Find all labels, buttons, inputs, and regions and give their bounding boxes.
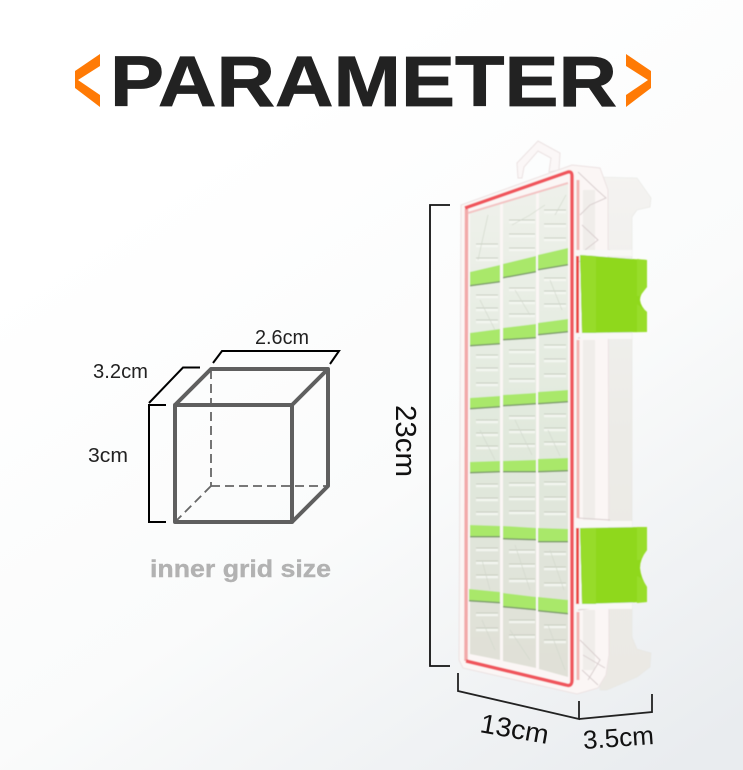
green divider bars xyxy=(469,248,568,613)
cube diagram: inner grid size xyxy=(88,327,339,583)
lid side panel shading xyxy=(583,190,595,670)
label: 13cm xyxy=(478,708,551,750)
hanging tab xyxy=(517,141,560,178)
red gasket seal xyxy=(465,172,572,685)
cube solid edges xyxy=(175,369,328,522)
left pale seal xyxy=(464,209,468,661)
product photo: tackle box xyxy=(459,141,651,694)
dimension: 13cm xyxy=(458,673,579,750)
icon: left orange chevron xyxy=(75,54,100,107)
white hinge bands xyxy=(580,250,632,609)
heading text: PARAMETER xyxy=(110,43,617,122)
caption: inner grid size: inner grid size xyxy=(150,556,331,583)
top inner pink seal xyxy=(468,183,568,213)
bracket xyxy=(579,694,652,719)
compartment ledge shadows xyxy=(476,210,566,640)
clear lid body xyxy=(459,165,609,694)
green clip: bottom xyxy=(580,527,647,604)
label: 3cm: 3cm xyxy=(88,445,128,467)
title xyxy=(75,43,651,122)
dimension: 3.5cm xyxy=(579,694,655,755)
dimension bracket: 2.6cm xyxy=(213,351,339,364)
label: 3.5cm xyxy=(582,720,655,755)
cube hidden edges xyxy=(175,370,328,522)
compartment ledges xyxy=(476,212,566,642)
dimension bracket: 3.2cm xyxy=(149,368,200,403)
green clip: top xyxy=(580,255,647,333)
label: 2.6cm: 2.6cm xyxy=(255,327,309,349)
lid side details xyxy=(578,172,610,685)
label: 23cm xyxy=(389,405,421,477)
red clip-side strips xyxy=(576,256,579,604)
white tray behind xyxy=(600,177,651,690)
bracket xyxy=(430,205,450,666)
outer pink seal xyxy=(576,180,580,680)
bracket xyxy=(458,673,579,719)
scratch lines on clear lid xyxy=(478,195,566,670)
icon: right orange chevron xyxy=(626,54,651,107)
green bar shadows xyxy=(469,250,568,614)
inner compartments xyxy=(470,184,568,677)
dimension: 23cm xyxy=(389,205,450,666)
label: 3.2cm: 3.2cm xyxy=(93,361,148,383)
dimension bracket: 3cm xyxy=(149,405,166,522)
